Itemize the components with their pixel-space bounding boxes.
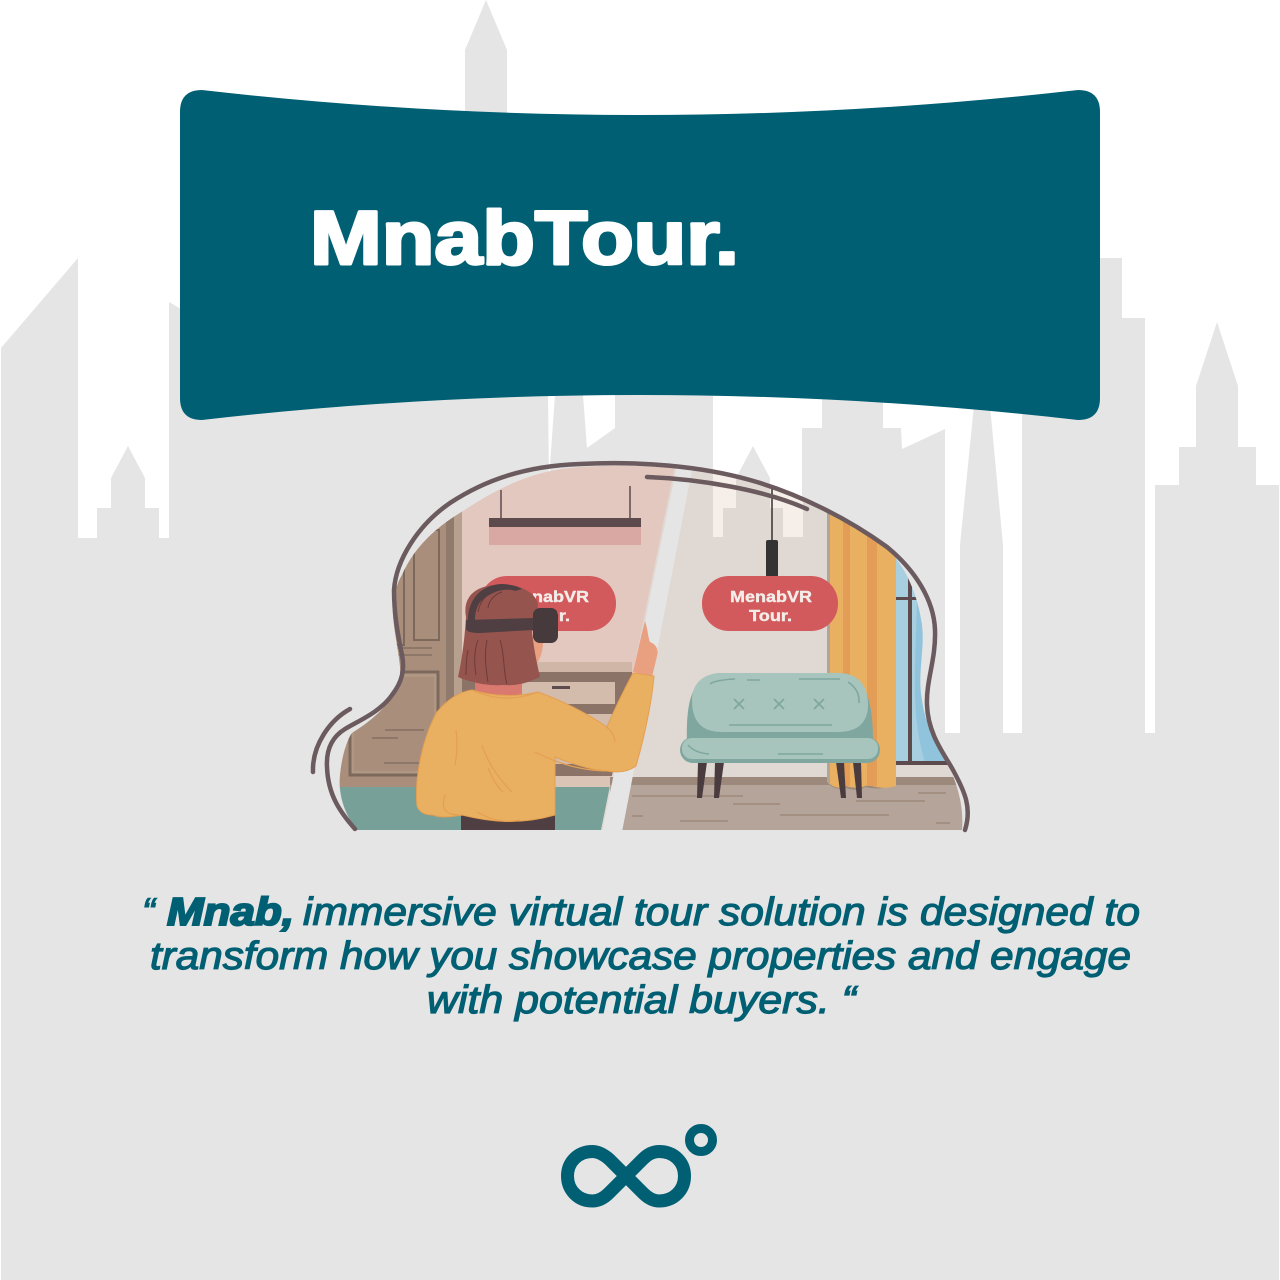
quote line 1: “ xyxy=(142,891,157,934)
title: MnabTour. xyxy=(310,196,739,281)
quote line 1: Mnab, xyxy=(167,891,294,934)
left sign xyxy=(480,576,616,631)
illustration: VR virtual tour room xyxy=(313,455,970,835)
right sign: MenabVR xyxy=(730,589,812,606)
sweater creases xyxy=(443,690,615,821)
yellow sweater xyxy=(416,673,654,821)
quote line 2: transform how you showcase properties and engage xyxy=(150,935,1131,978)
gray diagonal divider xyxy=(602,465,693,832)
hanging lamp xyxy=(766,486,778,577)
left sign: Tour. xyxy=(527,608,570,625)
bench xyxy=(680,673,880,798)
right sign: Tour. xyxy=(749,608,792,625)
quote line 1: immersive virtual tour solution is designed to xyxy=(303,891,1140,934)
motion arc top right xyxy=(647,477,807,509)
person wearing VR headset xyxy=(416,584,658,830)
right room wall xyxy=(600,455,970,835)
VR headset xyxy=(468,584,522,621)
pale skyline showing through wall xyxy=(713,470,803,537)
curtain xyxy=(826,500,898,790)
quote text xyxy=(142,891,1140,1022)
right sign xyxy=(702,576,838,631)
logo xyxy=(568,1128,712,1201)
left ceiling lamp xyxy=(489,486,641,545)
trousers xyxy=(461,812,555,830)
room interior xyxy=(330,455,970,835)
quote line 3: with potential buyers. “ xyxy=(427,979,858,1022)
blob outline xyxy=(327,463,968,830)
right floor xyxy=(610,777,970,832)
left room wall xyxy=(340,466,674,812)
title banner xyxy=(180,90,1100,420)
wooden door xyxy=(340,512,462,790)
hair xyxy=(458,585,540,685)
window xyxy=(895,558,948,765)
motion arc left xyxy=(313,709,350,772)
face and neck xyxy=(528,635,543,668)
teal floor xyxy=(330,787,615,832)
dresser xyxy=(462,662,632,788)
left sign: MenabVR xyxy=(507,589,589,606)
hand pointing xyxy=(633,621,658,677)
